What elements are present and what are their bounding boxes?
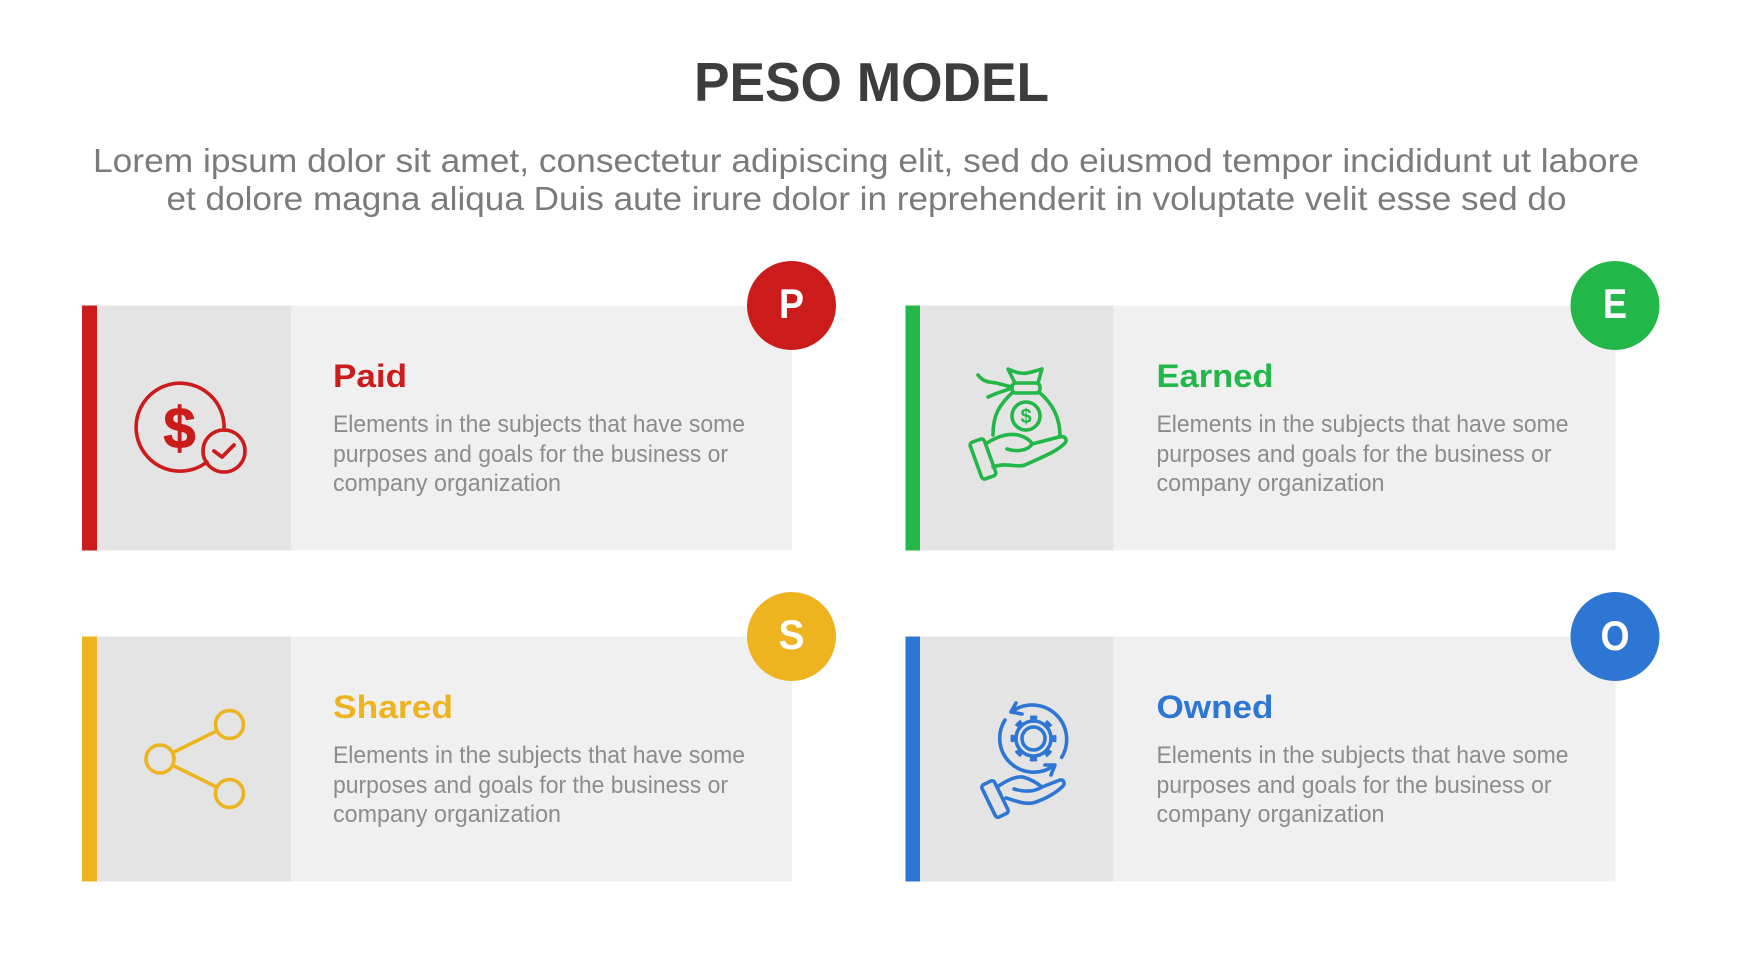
badge: P: P — [779, 280, 804, 327]
badge: E: E — [1603, 280, 1627, 327]
text block: owned — [1156, 742, 1568, 828]
heading: earned: Earned — [1156, 358, 1274, 394]
text block: shared: company organization — [333, 801, 561, 828]
subtitle text — [93, 142, 1639, 217]
heading: shared: Shared — [333, 689, 453, 725]
subtitle text: et dolore magna aliqua Duis aute irure dolor in reprehenderit in voluptate velit esse sed do — [166, 180, 1566, 217]
text block: earned: purposes and goals for the business or — [1156, 441, 1552, 468]
text block: earned — [1156, 411, 1568, 497]
icon: money bag in hand: $ — [1020, 406, 1032, 428]
icon: money bag in hand — [969, 369, 1066, 480]
icon: dollar coin with check — [136, 383, 245, 472]
icon: share nodes — [146, 710, 244, 808]
text block: paid — [333, 411, 745, 497]
badge: O — [1570, 592, 1660, 681]
text block: shared: purposes and goals for the business or — [333, 772, 728, 799]
heading: owned: Owned — [1156, 689, 1274, 725]
panel: owned — [906, 592, 1660, 882]
badge: S: S — [778, 611, 804, 658]
text block: shared — [333, 742, 745, 828]
panel: shared — [82, 592, 836, 882]
icon: dollar coin with check: $ — [163, 396, 196, 461]
heading: paid: Paid — [333, 358, 407, 394]
text block: shared: Elements in the subjects that have some — [333, 742, 745, 769]
text block: paid: purposes and goals for the business or — [333, 441, 728, 468]
panel: earned — [906, 261, 1660, 550]
text block: paid: Elements in the subjects that have some — [333, 411, 745, 438]
text block: earned: Elements in the subjects that have some — [1156, 411, 1568, 438]
text block: earned: company organization — [1156, 470, 1384, 497]
text block: paid: company organization — [333, 470, 561, 497]
badge: S — [747, 592, 836, 681]
badge: P — [747, 261, 836, 350]
title: PESO MODEL — [694, 51, 1049, 113]
subtitle text: Lorem ipsum dolor sit amet, consectetur adipiscing elit, sed do eiusmod tempor incididunt ut labore — [93, 142, 1639, 179]
text block: owned: Elements in the subjects that have some — [1156, 742, 1568, 769]
panel: paid — [82, 261, 836, 550]
text block: owned: company organization — [1156, 801, 1384, 828]
icon: gear in hand — [981, 703, 1067, 818]
badge: E — [1570, 261, 1660, 350]
badge: O: O — [1600, 612, 1630, 659]
text block: owned: purposes and goals for the business or — [1156, 772, 1552, 799]
